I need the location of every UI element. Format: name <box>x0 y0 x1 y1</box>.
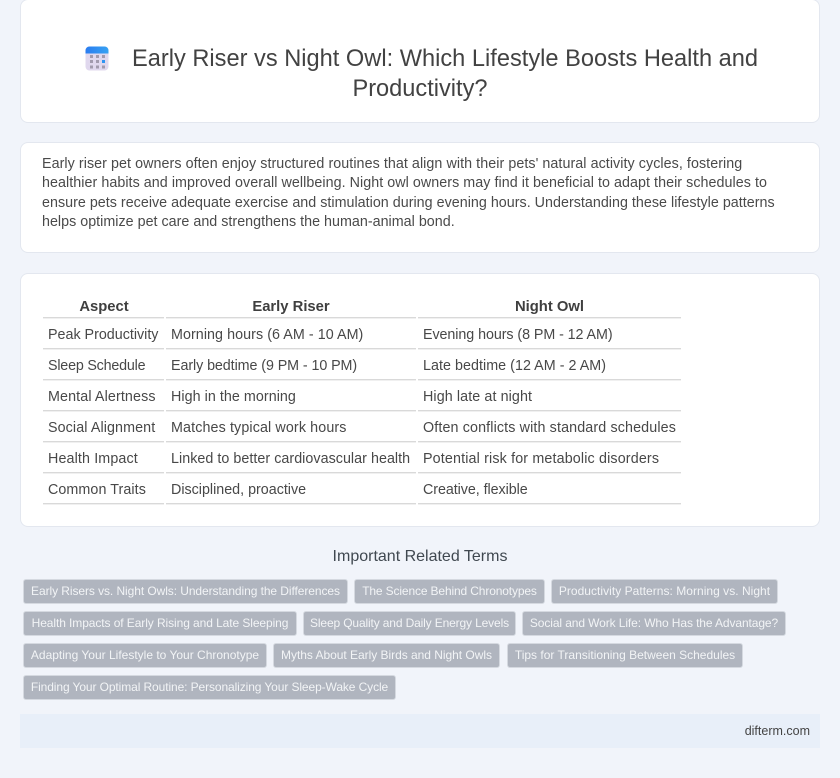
title <box>132 46 758 102</box>
tag: Early Risers vs. Night Owls: Understanding the Differences <box>31 584 340 598</box>
intro text <box>42 156 775 230</box>
intro text: healthier habits and improved overall wellbeing. Night owl owners may find it beneficial to adapt their schedules to <box>42 175 767 191</box>
row: health impact: Health Impact <box>48 451 138 467</box>
table <box>43 299 681 505</box>
tag <box>23 611 297 636</box>
row: health impact: Potential risk for metabolic disorders <box>423 451 659 467</box>
footer bar <box>20 714 820 748</box>
row: common traits: Disciplined, proactive <box>171 482 306 498</box>
tag: Productivity Patterns: Morning vs. Night <box>559 584 770 598</box>
column headers: Night Owl <box>515 299 584 315</box>
column headers <box>79 299 584 315</box>
tag <box>354 579 545 604</box>
row: sleep schedule: Early bedtime (9 PM - 10 PM) <box>171 358 357 374</box>
tag <box>23 675 396 700</box>
icon: calendar <box>86 46 108 70</box>
tag <box>551 579 778 604</box>
related term tags <box>23 579 786 700</box>
tag: Adapting Your Lifestyle to Your Chronotype <box>31 648 259 662</box>
heading: related terms: Important Related Terms <box>333 548 507 565</box>
title: Productivity? <box>352 76 488 102</box>
header panel <box>20 0 820 123</box>
intro text: helps optimize pet care and strengthens the human-animal bond. <box>42 214 455 230</box>
column headers: Early Riser <box>252 299 330 315</box>
panel: intro paragraph <box>20 142 820 253</box>
tag: The Science Behind Chronotypes <box>362 584 537 598</box>
tag <box>273 643 500 668</box>
row: mental alertness: High late at night <box>423 389 532 405</box>
row: common traits: Creative, flexible <box>423 482 528 498</box>
row: peak productivity: Morning hours (6 AM - 10 AM) <box>171 327 363 343</box>
row: peak productivity: Peak Productivity <box>48 327 158 343</box>
tag: Health Impacts of Early Rising and Late Sleeping <box>32 616 288 630</box>
row: peak productivity <box>48 327 613 343</box>
panel: comparison table <box>20 273 820 527</box>
tag: Myths About Early Birds and Night Owls <box>281 648 492 662</box>
row: health impact <box>48 451 659 467</box>
tag: Tips for Transitioning Between Schedules <box>515 648 735 662</box>
row: social alignment: Often conflicts with standard schedules <box>423 420 676 436</box>
row: sleep schedule: Sleep Schedule <box>48 358 145 374</box>
row: social alignment: Social Alignment <box>48 420 155 436</box>
tag: Finding Your Optimal Routine: Personalizing Your Sleep-Wake Cycle <box>31 680 388 694</box>
row: social alignment <box>48 420 676 436</box>
title: Early Riser vs Night Owl: Which Lifestyle Boosts Health and <box>132 46 758 72</box>
row: sleep schedule <box>48 358 606 374</box>
row: peak productivity: Evening hours (8 PM - 12 AM) <box>423 327 613 343</box>
tag: Sleep Quality and Daily Energy Levels <box>310 616 509 630</box>
row: mental alertness: Mental Alertness <box>48 389 156 405</box>
tag <box>507 643 743 668</box>
row: sleep schedule: Late bedtime (12 AM - 2 AM) <box>423 358 606 374</box>
tag: Social and Work Life: Who Has the Advantage? <box>530 616 778 630</box>
row: health impact: Linked to better cardiovascular health <box>171 451 410 467</box>
row: mental alertness <box>48 389 532 405</box>
row: mental alertness: High in the morning <box>171 389 296 405</box>
tag <box>303 611 516 636</box>
intro text: Early riser pet owners often enjoy structured routines that align with their pets' natural activity cycles, fostering <box>42 156 742 172</box>
row: social alignment: Matches typical work hours <box>171 420 347 436</box>
column headers: Aspect <box>79 299 129 315</box>
row: common traits <box>48 482 528 498</box>
tag <box>522 611 786 636</box>
tag <box>23 643 267 668</box>
intro text: ensure pets receive adequate exercise and stimulation during evening hours. Understanding these lifestyle patterns <box>42 195 775 211</box>
row: common traits: Common Traits <box>48 482 146 498</box>
tag <box>23 579 348 604</box>
footer source: difterm.com <box>745 724 810 738</box>
